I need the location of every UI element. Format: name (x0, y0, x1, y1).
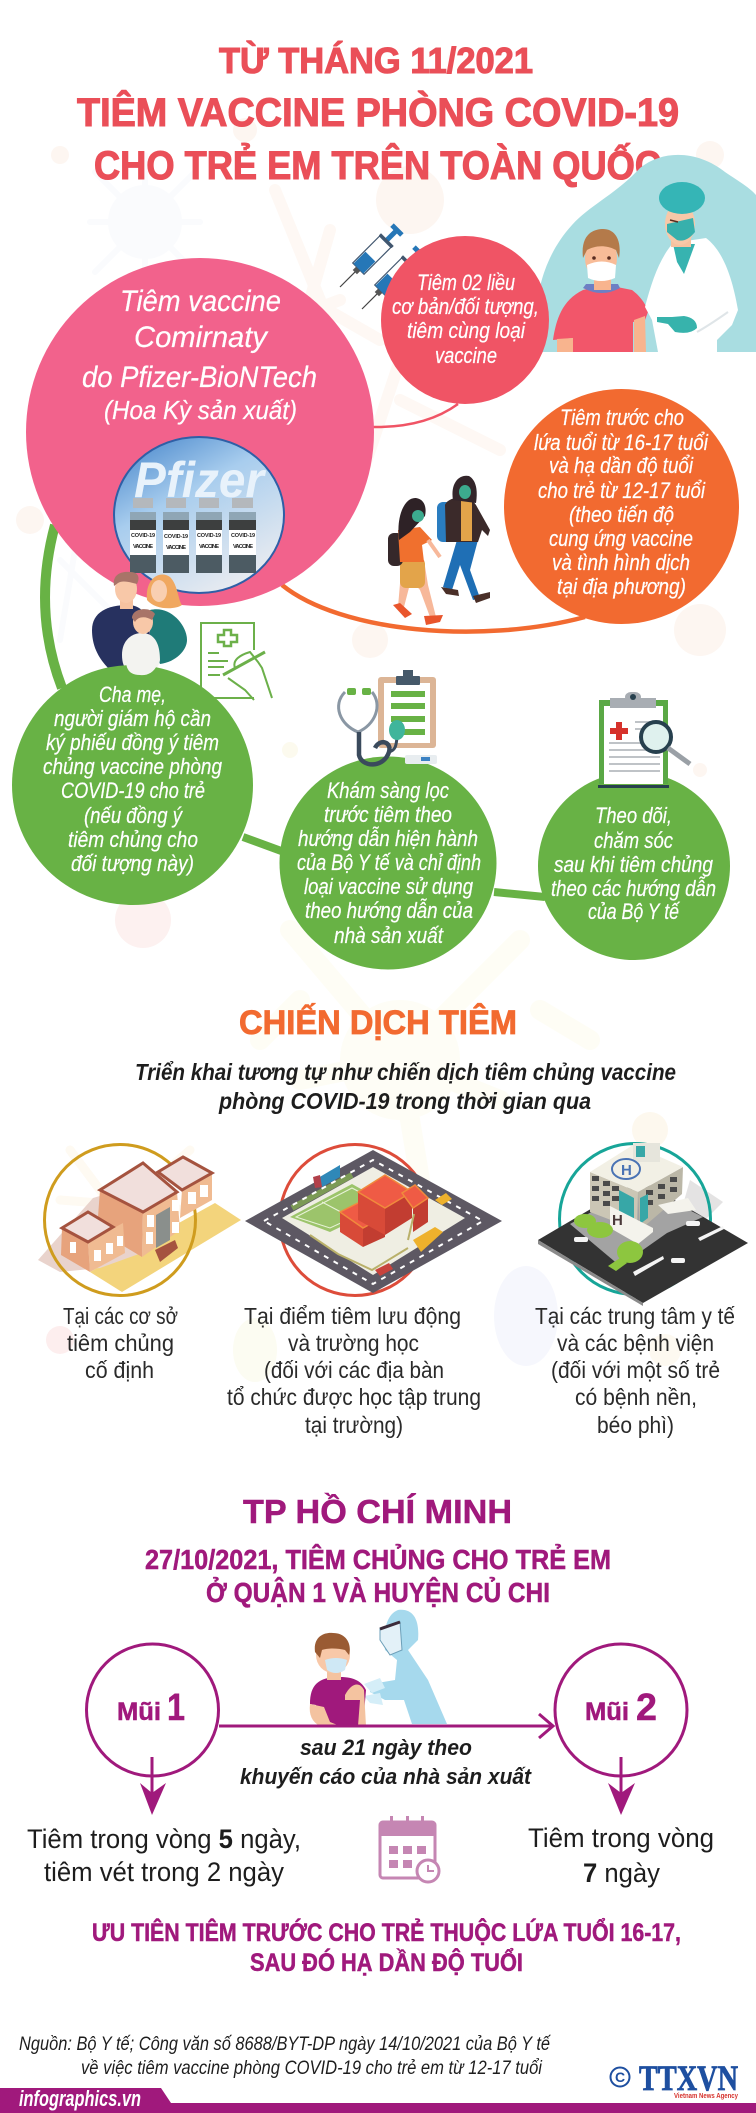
caption: mobile sites and schools: tại trường) (305, 1412, 403, 1438)
panel: two doses: tiêm cùng loại (407, 318, 526, 343)
caption: medical centres and hospitals: Tại các trung tâm y tế (535, 1303, 735, 1329)
panel: guardian consent: (nếu đồng ý (84, 803, 184, 828)
caption: fixed sites: Tại các cơ sở (63, 1303, 178, 1329)
caption: medical centres and hospitals (535, 1303, 735, 1438)
TTXVN logo: C (615, 2069, 625, 2085)
circle: dose 2: 2 (636, 1687, 657, 1729)
icon: syringes (334, 222, 427, 315)
source note (19, 2034, 551, 2079)
illustration: hospital: H (612, 1212, 623, 1229)
Pfizer vials photo: VACCINE (166, 545, 186, 551)
title: TỪ THÁNG 11/2021 (219, 39, 533, 81)
icon: clipboard with magnifier (598, 692, 690, 788)
panel: pre-vaccination screening: loại vaccine sử dụng (304, 874, 474, 899)
panel: age groups (504, 389, 739, 624)
TTXVN logo (610, 2058, 738, 2100)
dose 1 timing: tiêm vét trong 2 ngày (44, 1857, 284, 1887)
connector: green circle 1 to 2 (243, 837, 284, 852)
vaccine name text: Tiêm vaccine (120, 285, 281, 318)
campaign description: phòng COVID-19 trong thời gian qua (218, 1088, 591, 1114)
caption: medical centres and hospitals: có bệnh nền, (575, 1384, 697, 1410)
Pfizer vials photo: COVID-19 (164, 534, 188, 540)
circle: dose 1 (86, 1644, 218, 1776)
panel: guardian consent: người giám hộ cần (54, 706, 211, 731)
panel: guardian consent: tiêm chủng cho (68, 827, 198, 852)
panel: guardian consent: đối tượng này) (71, 851, 194, 876)
caption: medical centres and hospitals: (đối với một số trẻ (551, 1357, 720, 1383)
panel: monitoring after injection: chăm sóc (594, 828, 673, 853)
panel: guardian consent: COVID-19 cho trẻ (61, 778, 205, 803)
panel: age groups: lứa tuổi từ 16-17 tuổi (534, 430, 709, 455)
dose 1 timing (27, 1824, 301, 1887)
source note: về việc tiêm vaccine phòng COVID-19 cho trẻ em từ 12-17 tuổi (81, 2058, 543, 2079)
panel: guardian consent: ký phiếu đồng ý tiêm (46, 730, 219, 755)
footer bar (0, 2086, 756, 2113)
interval note: khuyến cáo của nhà sản xuất (240, 1764, 533, 1789)
interval note (240, 1735, 533, 1789)
interval note: sau 21 ngày theo (300, 1735, 472, 1760)
panel: monitoring after injection: của Bộ Y tế (588, 899, 680, 924)
Pfizer vials photo: VACCINE (133, 544, 153, 550)
title (77, 39, 679, 188)
panel: pre-vaccination screening: theo hướng dẫn của (305, 898, 473, 923)
icon: signed consent form (201, 623, 272, 700)
footer bar: infographics.vn (19, 2086, 141, 2111)
heading: campaign: CHIẾN DỊCH TIÊM (239, 1004, 517, 1042)
campaign description (135, 1059, 676, 1114)
panel: pre-vaccination screening: nhà sản xuất (334, 923, 444, 948)
panel: age groups: tại địa phương) (557, 574, 686, 599)
TTXVN logo: Vietnam News Agency (674, 2093, 738, 2100)
connector: pink circle to green circle (45, 525, 62, 688)
heading: Ho Chi Minh City: TP HỒ CHÍ MINH (243, 1493, 512, 1530)
panel: pre-vaccination screening (280, 756, 496, 970)
circle: dose 1: Mũi (117, 1698, 161, 1726)
icon: clipboard and stethoscope (339, 670, 437, 764)
connector: green circle 2 to 3 (494, 892, 545, 897)
icon: calendar and clock (380, 1816, 439, 1882)
illustration: school and mobile site (245, 1144, 502, 1296)
caption: mobile sites and schools: và trường học (288, 1330, 419, 1356)
dose 2 timing: 7 ngày (583, 1858, 660, 1888)
panel: guardian consent: chủng vaccine phòng (43, 754, 223, 779)
caption: fixed sites: cố định (85, 1357, 154, 1383)
panel: monitoring after injection (538, 772, 730, 960)
Pfizer vials photo: VACCINE (233, 544, 253, 550)
source note: Nguồn: Bộ Y tế; Công văn số 8688/BYT-DP ngày 14/10/2021 của Bộ Y tế (19, 2034, 551, 2055)
caption: mobile sites and schools (227, 1303, 481, 1438)
illustration: hospital: H (621, 1162, 632, 1179)
Pfizer vials photo: VACCINE (199, 544, 219, 550)
priority note: SAU ĐÓ HẠ DẦN ĐỘ TUỔI (250, 1947, 523, 1977)
Pfizer vials photo: COVID-19 (197, 533, 221, 539)
title: TIÊM VACCINE PHÒNG COVID-19 (77, 89, 679, 135)
caption: fixed sites: tiêm chủng (67, 1330, 174, 1356)
caption: fixed sites (63, 1303, 178, 1383)
panel: two doses: cơ bản/đối tượng, (392, 294, 539, 319)
campaign description: Triển khai tương tự như chiến dịch tiêm chủng vaccine (135, 1059, 676, 1085)
panel: guardian consent (12, 665, 253, 905)
panel: age groups: (theo tiến độ (569, 502, 674, 527)
illustration: family (92, 572, 187, 675)
vaccine name text: (Hoa Kỳ sản xuất) (104, 395, 297, 425)
panel: monitoring after injection: sau khi tiêm chủng (554, 852, 714, 877)
panel: guardian consent: Cha mẹ, (99, 682, 166, 707)
caption: mobile sites and schools: Tại điểm tiêm lưu động (244, 1303, 461, 1329)
panel: age groups: và tình hình dịch (552, 550, 690, 575)
caption: medical centres and hospitals: béo phì) (597, 1412, 674, 1438)
priority note (92, 1917, 681, 1977)
caption: mobile sites and schools: tổ chức được học tập trung (227, 1384, 481, 1410)
Pfizer vials photo: COVID-19 (231, 533, 255, 539)
caption: medical centres and hospitals: và các bệnh viện (557, 1330, 714, 1356)
circle: dose 2 (555, 1644, 687, 1776)
arrow: dose 2 down (608, 1757, 635, 1815)
arrow: dose 1 down (140, 1757, 166, 1815)
connector: red circle to pink circle (372, 404, 458, 427)
panel: age groups: cung ứng vaccine (549, 526, 693, 551)
dose 2 timing (528, 1823, 714, 1888)
vaccine name text (82, 285, 317, 425)
illustration: two students walking (388, 476, 490, 625)
subheading: date and districts: 27/10/2021, TIÊM CHỦNG CHO TRẺ EM (145, 1543, 611, 1575)
panel: two doses: vaccine (435, 343, 497, 368)
subheading: date and districts (145, 1543, 611, 1608)
illustration: child vaccinated by medic in protective suit (310, 1610, 447, 1726)
Pfizer vials photo: Pfizer (134, 452, 266, 508)
panel: pre-vaccination screening: Khám sàng lọc (327, 778, 449, 803)
panel: pre-vaccination screening: của Bộ Y tế và chỉ định (297, 850, 481, 875)
panel: monitoring after injection: Theo dõi, (595, 803, 672, 828)
illustration: boy and nurse on teal blob (536, 155, 756, 352)
vaccine name text: Comirnaty (134, 321, 269, 354)
circle: dose 1: 1 (167, 1687, 185, 1729)
child overlapping the green circle (126, 640, 157, 675)
illustration: fixed vaccination site building (38, 1144, 241, 1296)
panel: pre-vaccination screening: trước tiêm theo (324, 802, 452, 827)
circle: dose 2: Mũi (585, 1698, 629, 1726)
connector: pink circle to orange circle (282, 585, 585, 632)
panel: age groups: và hạ dần độ tuổi (549, 453, 694, 478)
panel: pre-vaccination screening: hướng dẫn hiện hành (298, 826, 478, 851)
arrow: from dose 1 to dose 2 (219, 1714, 553, 1738)
vaccine name text: do Pfizer-BioNTech (82, 361, 317, 394)
title: CHO TRẺ EM TRÊN TOÀN QUỐC (94, 142, 661, 188)
dose 1 timing: Tiêm trong vòng 5 ngày, (27, 1824, 301, 1854)
illustration: hospital (538, 1143, 748, 1306)
panel: age groups: cho trẻ từ 12-17 tuổi (538, 478, 706, 503)
panel: two doses (381, 236, 549, 404)
Pfizer vials photo: COVID-19 (131, 533, 155, 539)
dose 2 timing: Tiêm trong vòng (528, 1823, 714, 1853)
subheading: date and districts: Ở QUẬN 1 VÀ HUYỆN CỦ CHI (206, 1576, 550, 1608)
panel: vaccine Comirnaty (26, 258, 374, 606)
panel: two doses: Tiêm 02 liều (417, 270, 515, 295)
Pfizer vials photo (114, 437, 284, 593)
caption: mobile sites and schools: (đối với các địa bàn (264, 1357, 444, 1383)
panel: monitoring after injection: theo các hướng dẫn (551, 876, 716, 901)
panel: age groups: Tiêm trước cho (560, 405, 684, 430)
